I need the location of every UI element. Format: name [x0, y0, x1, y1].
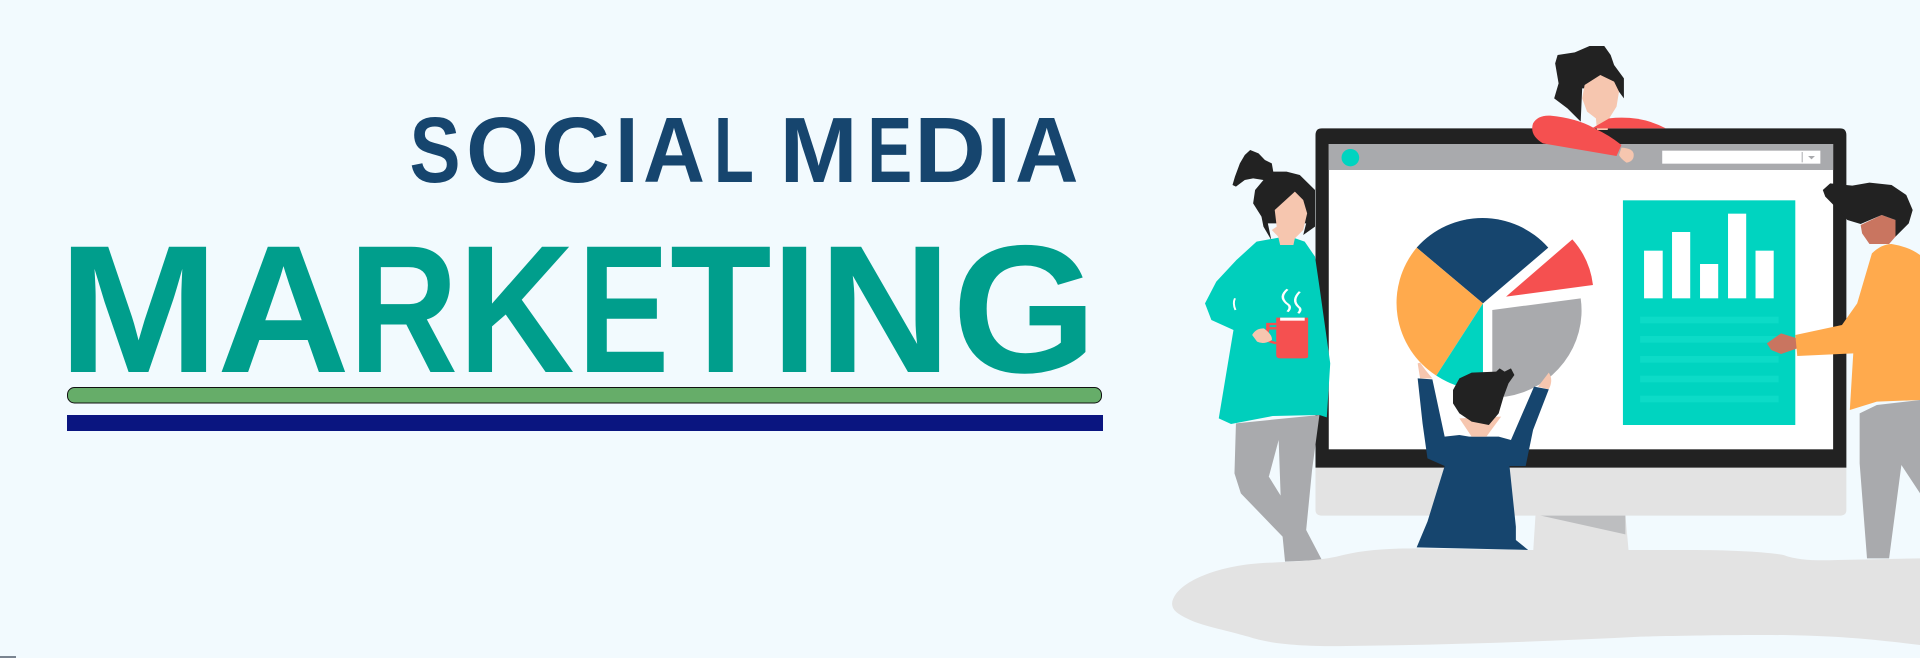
heading: marketing: A	[217, 207, 350, 411]
person: top woman	[1532, 46, 1666, 163]
heading: social media: A	[643, 98, 705, 202]
person: right man	[1767, 183, 1920, 558]
heading: social media: O	[466, 98, 539, 202]
heading: social media: A	[1015, 98, 1078, 202]
floor blob	[1172, 548, 1920, 646]
person: centre man from behind	[1417, 363, 1551, 550]
hands	[1418, 363, 1432, 378]
heading: marketing: R	[349, 207, 458, 411]
heading: social media: I	[615, 98, 638, 202]
monitor screen	[1329, 144, 1833, 449]
hand	[1252, 328, 1272, 343]
hair	[1233, 150, 1315, 240]
hair	[1823, 183, 1913, 237]
monitor chin	[1316, 467, 1846, 516]
shirt	[1795, 244, 1920, 410]
corner sliver	[0, 656, 16, 658]
heading: social media: I	[987, 98, 1010, 202]
monitor frame	[1316, 128, 1846, 468]
heading: marketing: T	[670, 207, 772, 411]
heading: social media: S	[410, 98, 460, 202]
heading: marketing: I	[772, 207, 817, 411]
browser toolbar	[1329, 144, 1833, 170]
illustration: monitor with people	[1172, 46, 1920, 646]
trousers	[1234, 415, 1322, 562]
heading: marketing: M	[58, 207, 219, 411]
steam	[1283, 289, 1300, 313]
neck	[1459, 417, 1501, 437]
green underline bar	[68, 388, 1102, 403]
heading: marketing: G	[952, 207, 1097, 411]
heading: social media: M	[780, 98, 858, 202]
heading: marketing: N	[818, 207, 952, 411]
hair	[1453, 368, 1514, 425]
mug	[1276, 318, 1308, 358]
face and neck	[1861, 215, 1895, 244]
trousers	[1860, 400, 1920, 558]
teal report panel	[1623, 200, 1795, 425]
heading: social media: C	[541, 98, 610, 202]
heading: social media: D	[914, 98, 986, 202]
heading: social media: L	[714, 98, 753, 202]
pie chart	[1397, 218, 1593, 397]
person: left woman	[1205, 150, 1330, 562]
sweater	[1205, 237, 1330, 424]
heading: marketing: E	[578, 207, 669, 411]
jacket	[1417, 378, 1549, 550]
hand	[1767, 333, 1797, 354]
face and neck	[1272, 192, 1307, 245]
monitor stand	[1533, 515, 1629, 553]
heading: social media: E	[867, 98, 912, 202]
heading: marketing: K	[458, 207, 574, 411]
navy underline bar	[67, 415, 1103, 431]
